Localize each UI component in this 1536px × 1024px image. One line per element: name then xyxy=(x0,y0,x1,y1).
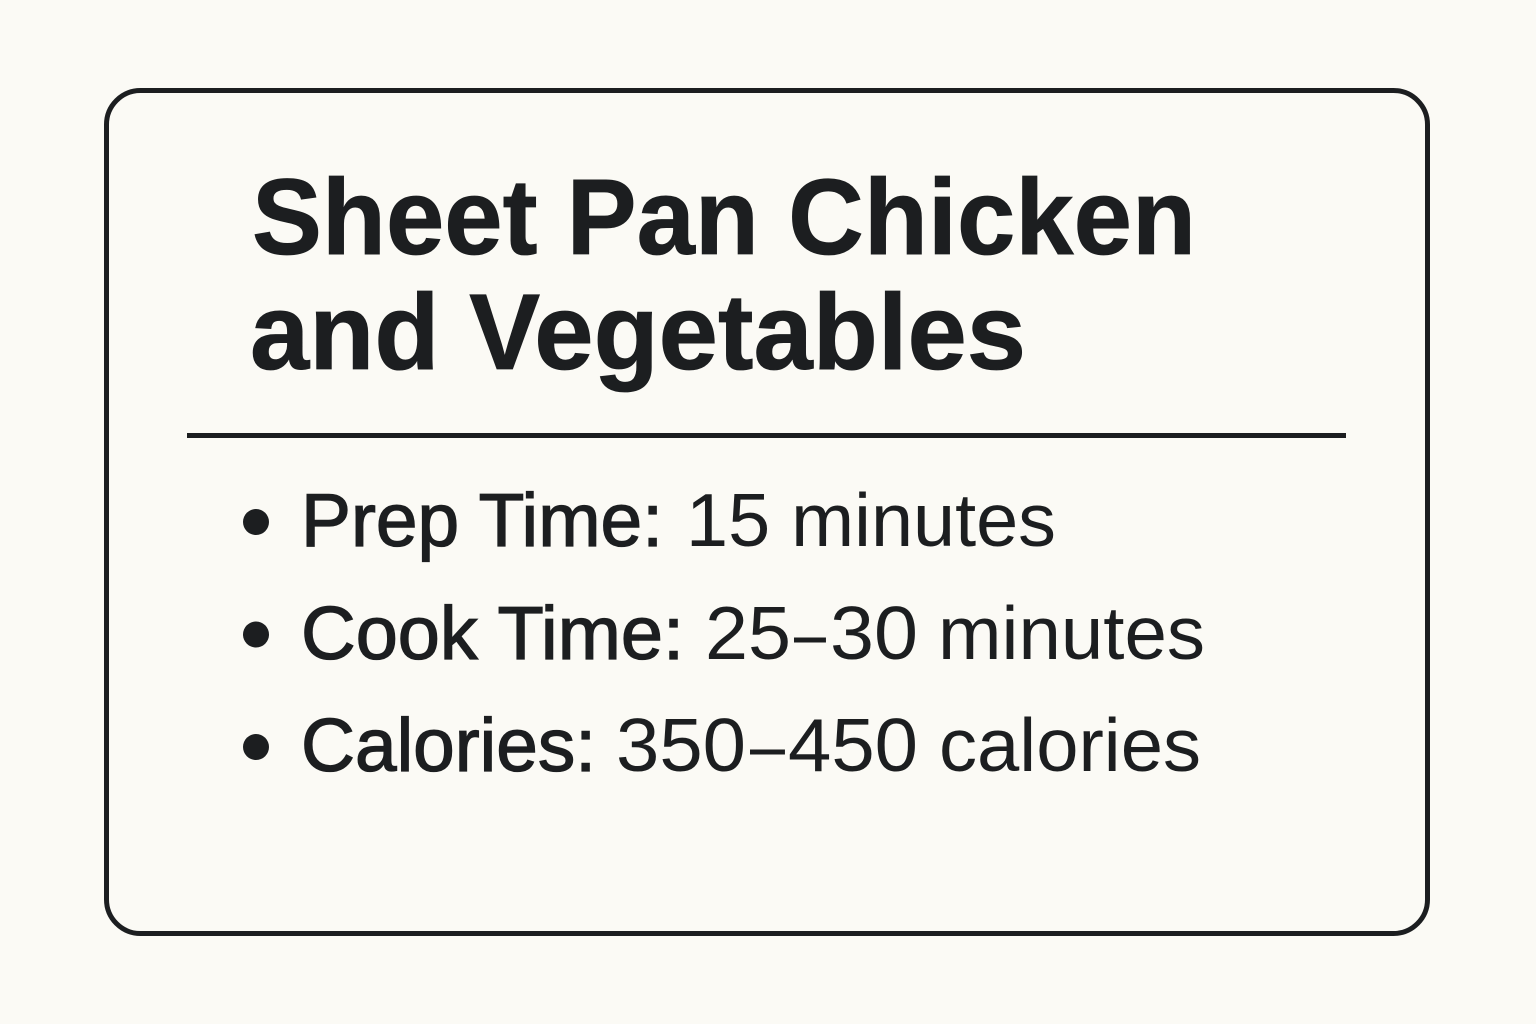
prep time item xyxy=(243,478,1056,562)
prep time item: Prep Time: xyxy=(301,478,663,562)
panel: recipe card xyxy=(106,90,1428,934)
cook time item: 25 xyxy=(705,591,791,675)
cook time item: 30 xyxy=(830,591,918,675)
calories item: 450 xyxy=(788,703,918,787)
calories item: Calories: xyxy=(301,703,596,787)
title: and Vegetables xyxy=(250,271,1026,392)
calories item: – xyxy=(750,703,785,787)
prep time item: 15 minutes xyxy=(686,478,1056,562)
cook time item: Cook Time: xyxy=(301,591,684,675)
title xyxy=(250,156,1196,392)
cook time item xyxy=(243,591,1205,675)
title: Sheet Pan Chicken xyxy=(252,156,1196,277)
cook time item: minutes xyxy=(938,591,1205,675)
calories item xyxy=(243,703,1201,787)
cook time item: – xyxy=(794,591,826,675)
calories item: calories xyxy=(939,703,1201,787)
calories item: 350 xyxy=(616,703,746,787)
